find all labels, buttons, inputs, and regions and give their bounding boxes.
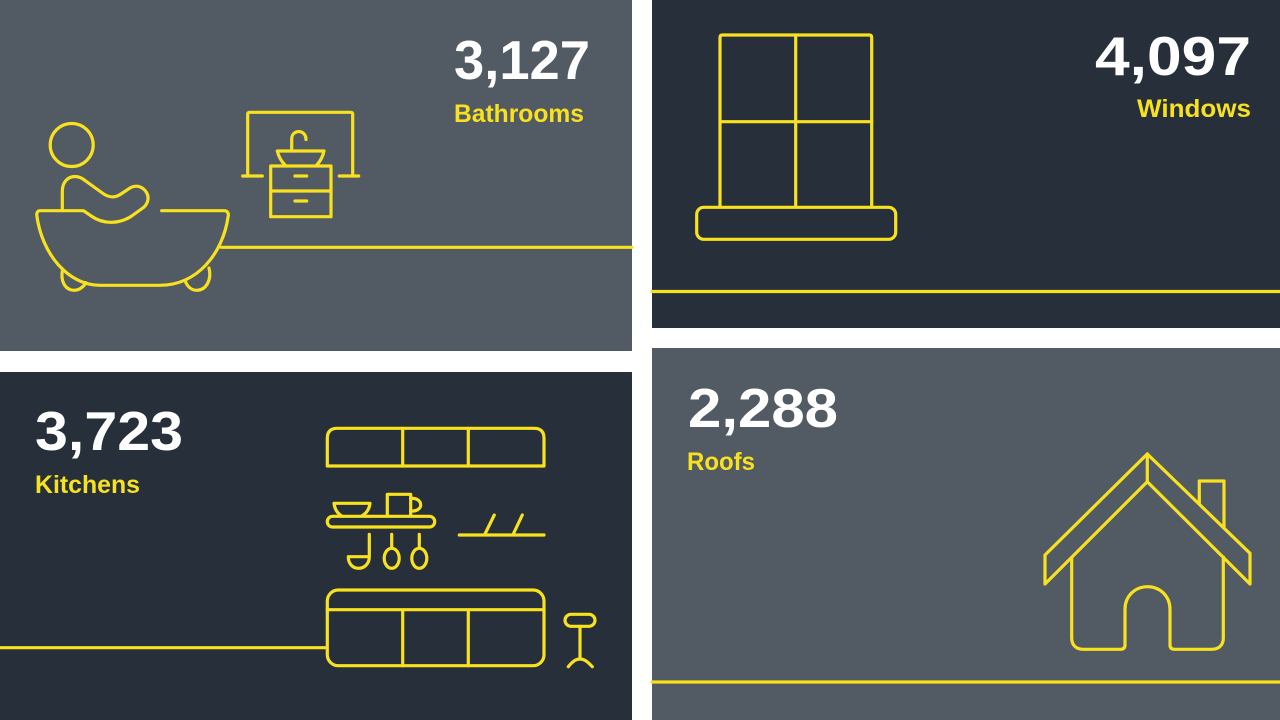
panel: windows — [652, 0, 1280, 328]
icon: shelf with bowl and cup — [327, 494, 435, 527]
bathrooms count: 3,127 — [454, 29, 590, 91]
icon: house — [1045, 454, 1250, 649]
floor line: bathrooms — [221, 246, 632, 249]
icon: lower cabinet — [327, 590, 544, 666]
icon: hanging utensils — [348, 534, 427, 568]
icon: window — [697, 35, 896, 239]
floor line: roofs — [652, 680, 1280, 684]
kitchens label: Kitchens — [35, 471, 140, 499]
icon: upper cabinet — [327, 428, 544, 466]
windows count: 4,097 — [1095, 25, 1251, 87]
roofs label: Roofs — [687, 448, 755, 476]
panel: roofs — [652, 348, 1280, 720]
floor line: kitchens — [0, 646, 325, 649]
windows label: Windows — [1137, 95, 1251, 123]
bathrooms label: Bathrooms — [454, 100, 584, 128]
panel: bathrooms — [0, 0, 632, 351]
kitchens count: 3,723 — [35, 400, 183, 462]
icon: stool — [565, 614, 595, 667]
floor line: windows — [652, 290, 1280, 293]
icon: wall rack — [459, 515, 544, 535]
roofs count: 2,288 — [688, 377, 838, 439]
icon: mirror and vanity — [243, 112, 359, 217]
panel: kitchens — [0, 372, 632, 720]
icon: person in bathtub — [37, 124, 228, 290]
